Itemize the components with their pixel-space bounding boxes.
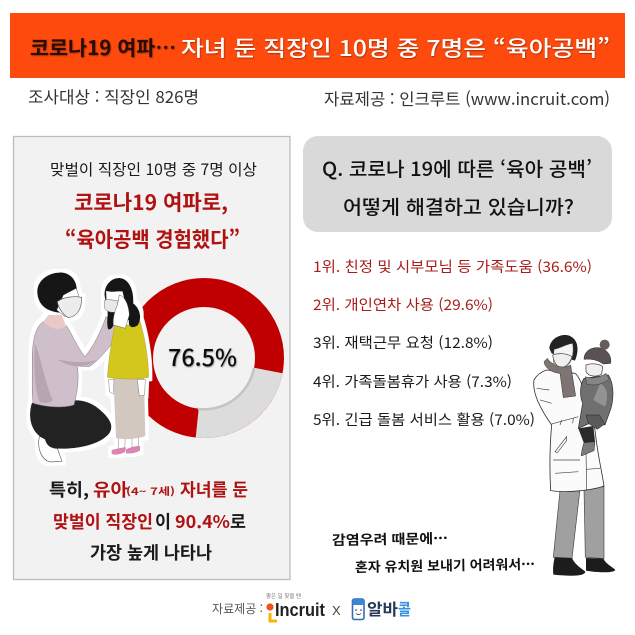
child's scarf — [585, 373, 609, 385]
survey subject: 조사대상 : 직장인 826명 — [28, 84, 199, 108]
donut chart 76.5% — [138, 292, 270, 424]
illustration: woman in white coat carrying a child — [534, 335, 615, 576]
mother's trousers — [30, 400, 111, 449]
panel conclusion text: (4~ 7세) — [126, 483, 175, 498]
panel heading: 코로나19 여파로, — [74, 187, 228, 217]
ranking list: 3위. 재택근무 요청 (12.8%) — [313, 332, 493, 353]
child's hands — [109, 379, 145, 396]
mother's neck — [43, 315, 66, 329]
woman's legs — [553, 487, 604, 559]
panel intro text: 맞벌이 직장인 10명 중 7명 이상 — [50, 158, 257, 180]
mother's body and arm — [32, 317, 125, 407]
donut value: 76.5% — [168, 339, 237, 373]
title: white part: 자녀 둔 직장인 10명 중 7명은 “육아공백” — [181, 32, 610, 63]
panel conclusion text: 90.4% — [175, 509, 230, 534]
title banner — [10, 13, 625, 78]
logo: Incruit: 좋은 일 찾을 땐 — [266, 592, 301, 600]
question text — [322, 153, 592, 220]
child's boot — [581, 442, 595, 456]
logo: Albacall: 콜 — [398, 596, 411, 620]
panel conclusion text: 가장 높게 나타나 — [90, 540, 212, 565]
question box — [303, 136, 612, 232]
child's yellow top — [107, 317, 149, 379]
panel conclusion text: 유아 — [93, 477, 128, 502]
handwritten quote: 혼자 유치원 보내기 어려워서··· — [355, 553, 535, 576]
sweater shadow — [34, 343, 97, 403]
mother's mask — [57, 297, 82, 318]
woman's boots — [553, 557, 615, 576]
ranking list: 2위. 개인연차 사용 (29.6%) — [313, 294, 493, 315]
panel conclusion text: 이 — [155, 509, 171, 534]
cross sign: X — [332, 603, 341, 618]
child's legs — [118, 437, 139, 450]
child's mitten — [586, 415, 605, 429]
phone icon — [352, 599, 364, 620]
logo: Albacall: 알바 — [367, 596, 398, 620]
child's hat — [584, 348, 611, 364]
woman's coat — [534, 370, 604, 492]
woman's hair — [549, 335, 578, 361]
woman's face — [553, 343, 573, 367]
jacket highlight — [593, 383, 607, 407]
ranking list: 4위. 가족돌봄휴가 사용 (7.3%) — [313, 371, 512, 392]
logo: Incruit — [266, 592, 325, 621]
handwritten quote: 감염우려 때문에··· — [332, 527, 448, 549]
child's face — [106, 291, 125, 313]
logo: Albacall — [352, 596, 411, 620]
child's pants — [578, 426, 595, 443]
panel conclusion text: 자녀를 둔 — [180, 477, 248, 502]
title: dark part: 코로나19 여파… — [30, 32, 176, 61]
panel: left summary — [14, 136, 290, 580]
coat seams — [537, 388, 600, 490]
mother's feet — [39, 437, 62, 462]
child's face mask — [586, 364, 603, 376]
panel heading: “육아공백 경험했다” — [65, 224, 240, 254]
ranking list — [313, 256, 592, 430]
panel conclusion text: 특히, — [49, 477, 89, 502]
mother's face — [57, 288, 79, 317]
data source: 자료제공 : 인크루트 (www.incruit.com) — [324, 86, 610, 110]
footer source credit: 자료제공 : — [212, 600, 263, 617]
logo mark — [266, 603, 277, 621]
child's hair — [105, 278, 140, 329]
panel conclusion text: 맞벌이 직장인 — [53, 509, 153, 534]
mother's hair — [37, 272, 77, 313]
question text: 어떻게 해결하고 있습니까? — [343, 191, 574, 220]
illustration: mother fitting a mask on her child — [30, 272, 149, 462]
mother's hand — [113, 295, 129, 328]
panel heading — [65, 187, 240, 254]
logo: Incruit: Incruit — [275, 600, 325, 620]
woman's mask — [553, 354, 572, 368]
handwritten quote — [332, 527, 535, 576]
panel conclusion text — [49, 477, 248, 565]
child's trousers — [113, 377, 145, 439]
woman's scarf — [544, 358, 576, 398]
panel conclusion text: 로 — [230, 509, 246, 534]
child's shoes — [112, 446, 140, 455]
question text: Q. 코로나 19에 따른 ‘육아 공백’ — [322, 153, 592, 182]
hat pompom — [600, 340, 610, 350]
ranking list: 5위. 긴급 돌봄 서비스 활용 (7.0%) — [313, 409, 535, 430]
child's jacket — [578, 375, 613, 428]
ranking list: 1위. 친정 및 시부모님 등 가족도움 (36.6%) — [313, 256, 592, 277]
child's mask — [105, 300, 119, 312]
